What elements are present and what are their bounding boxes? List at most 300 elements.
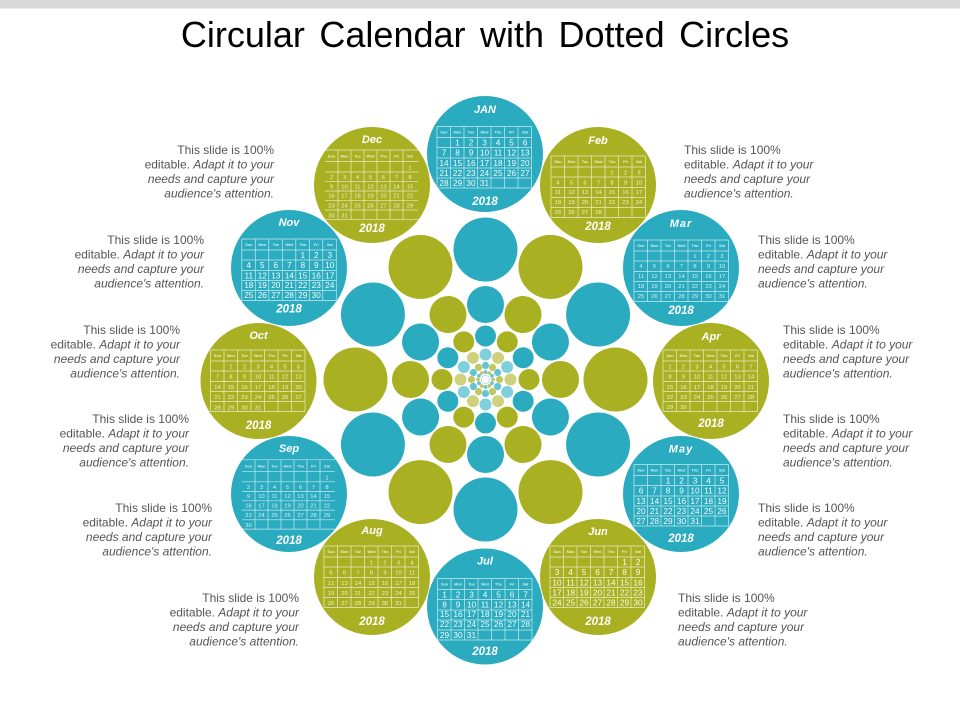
date grid: 17 <box>255 385 261 391</box>
date grid: Sat <box>636 160 643 164</box>
date grid: 28 <box>285 290 294 300</box>
date grid: 19 <box>507 158 516 168</box>
date grid: 20 <box>665 284 671 290</box>
date grid <box>438 578 532 640</box>
date grid: 28 <box>393 203 400 209</box>
date grid: 9 <box>682 374 685 380</box>
date grid: 29 <box>620 598 629 608</box>
date grid: Sun <box>245 243 253 247</box>
date grid: 16 <box>382 581 388 587</box>
date grid: 12 <box>282 374 288 380</box>
ring 3 <box>432 326 540 434</box>
date grid: Sat <box>523 582 529 586</box>
date grid: 24 <box>325 280 335 290</box>
date grid: 17 <box>395 581 402 587</box>
date grid: 5 <box>369 175 372 181</box>
date grid: 28 <box>650 516 659 526</box>
date grid: 20 <box>593 588 602 598</box>
date grid: 2 <box>243 364 246 370</box>
date grid: 18 <box>271 503 278 509</box>
text block: upper right 1: This slide is 100% <box>684 143 781 157</box>
date grid: 20 <box>507 609 517 619</box>
date grid: 8 <box>229 374 233 380</box>
date grid: 22 <box>324 503 330 509</box>
date grid: 17 <box>480 158 489 168</box>
date grid: Mon <box>258 464 266 468</box>
date grid: 2 <box>707 254 710 260</box>
date grid: 14 <box>285 270 294 280</box>
date grid: 8 <box>408 175 412 181</box>
dotted circles centre <box>324 218 648 542</box>
calendar: January <box>427 96 543 212</box>
date grid: 3 <box>327 250 332 260</box>
date grid: Wed <box>368 550 376 554</box>
month name: Dec <box>362 134 382 146</box>
date grid: Wed <box>678 244 686 248</box>
ring 6 <box>476 370 495 389</box>
text block: upper right 2: needs and capture your <box>758 262 885 276</box>
text block: middle left 2: This slide is 100% <box>92 412 189 426</box>
date grid: 22 <box>453 168 462 178</box>
date grid: 27 <box>507 619 517 629</box>
date grid: 15 <box>324 494 330 500</box>
date grid: 9 <box>314 260 319 270</box>
date grid: 13 <box>295 374 302 380</box>
date grid: 13 <box>582 190 588 196</box>
date grid: Fri <box>396 550 401 554</box>
date grid: 5 <box>286 485 289 491</box>
date grid: Thu <box>721 354 728 358</box>
date grid: 8 <box>442 600 447 610</box>
calendar: June <box>540 519 656 635</box>
date grid <box>634 464 728 526</box>
date grid: Fri <box>735 354 740 358</box>
date grid: 11 <box>354 184 361 190</box>
date grid: 17 <box>636 190 642 196</box>
date grid: Thu <box>299 243 307 247</box>
date grid: 7 <box>749 364 753 370</box>
date grid: 4 <box>639 264 643 270</box>
date grid: 16 <box>466 158 476 168</box>
date grid: 8 <box>370 570 373 576</box>
date grid: 30 <box>680 405 687 411</box>
date grid: Sun <box>214 354 222 358</box>
date grid: 11 <box>707 374 714 380</box>
date grid: 17 <box>467 609 476 619</box>
date grid: 10 <box>694 374 700 380</box>
date grid: 3 <box>343 175 346 181</box>
date grid: Sun <box>637 468 645 472</box>
date grid: 28 <box>310 513 317 519</box>
date grid: Fri <box>706 468 711 472</box>
date grid: 16 <box>241 385 248 391</box>
date grid: 26 <box>494 619 503 629</box>
year: 2018 <box>584 221 611 233</box>
date grid: Fri <box>283 354 287 358</box>
date grid: 24 <box>552 598 562 608</box>
date grid: Wed <box>481 582 490 586</box>
date grid: Thu <box>495 582 503 586</box>
date grid: 16 <box>633 578 643 588</box>
date grid: 24 <box>255 395 262 401</box>
date grid: 3 <box>637 170 641 176</box>
text block: upper left 2: needs and capture your <box>78 262 205 276</box>
date grid: 7 <box>680 264 683 270</box>
date grid: Sat <box>522 130 529 134</box>
month name: Aug <box>360 525 383 537</box>
date grid: 14 <box>393 184 400 190</box>
date grid: 9 <box>469 148 474 158</box>
date grid: 25 <box>493 168 503 178</box>
calendar: March <box>623 210 739 326</box>
date grid: 5 <box>722 364 726 370</box>
date grid: Tue <box>273 243 279 247</box>
text block: lower left 1: audience's attention. <box>102 544 212 558</box>
date grid: 1 <box>693 254 697 260</box>
date grid: 11 <box>271 494 278 500</box>
date grid: 31 <box>480 178 489 188</box>
date grid: 31 <box>341 213 348 219</box>
date grid: 27 <box>295 395 302 401</box>
date grid: 20 <box>734 385 741 391</box>
date grid: 19 <box>282 385 288 391</box>
date grid: 19 <box>717 496 727 506</box>
date grid: 23 <box>382 591 388 597</box>
date grid: 30 <box>382 601 388 607</box>
date grid: 23 <box>312 280 321 290</box>
date grid: 18 <box>244 280 254 290</box>
date grid: 13 <box>341 581 348 587</box>
date grid: 9 <box>679 486 684 496</box>
date grid <box>325 150 418 219</box>
date grid: Mon <box>341 154 349 158</box>
date grid: 12 <box>494 600 503 610</box>
date grid: 17 <box>258 503 265 509</box>
date grid: Sat <box>719 244 726 248</box>
date grid: Tue <box>271 464 278 468</box>
date grid: 20 <box>295 385 302 391</box>
date grid: 17 <box>325 270 335 280</box>
date grid: 28 <box>595 210 602 216</box>
date grid: 3 <box>695 364 699 370</box>
date grid: 4 <box>709 364 713 370</box>
date grid: 24 <box>395 591 402 597</box>
date grid: 27 <box>593 598 602 608</box>
month name: Mar <box>670 218 692 230</box>
date grid: 15 <box>620 578 629 588</box>
date grid: 12 <box>651 274 658 280</box>
date grid: 26 <box>651 294 658 300</box>
date grid: 28 <box>678 294 685 300</box>
date grid: 14 <box>214 385 221 391</box>
date grid <box>210 350 305 412</box>
calendar: September <box>231 436 347 552</box>
date grid: Fri <box>314 243 319 247</box>
date grid: 11 <box>268 374 275 380</box>
text block: lower right 1: needs and capture your <box>758 530 885 544</box>
date grid: 18 <box>480 609 490 619</box>
date grid: 23 <box>466 168 476 178</box>
date grid: Mon <box>567 550 575 554</box>
calendar: May <box>623 436 739 552</box>
year: 2018 <box>697 418 724 430</box>
date grid: 27 <box>636 516 646 526</box>
date grid: 9 <box>456 600 461 610</box>
date grid: 17 <box>341 194 348 200</box>
date grid: 20 <box>271 280 281 290</box>
date grid: Fri <box>623 160 628 164</box>
date grid: 5 <box>329 570 333 576</box>
date grid <box>551 156 646 218</box>
date grid: 22 <box>663 506 673 516</box>
text block: middle right 2: audience's attention. <box>783 456 893 470</box>
text block: middle right 2: editable. Adapt it to your <box>783 426 912 440</box>
date grid: 16 <box>622 190 629 196</box>
text block: upper right 2: editable. Adapt it to your <box>758 248 887 262</box>
date grid: 2 <box>314 250 319 260</box>
text block: upper right 2: This slide is 100% <box>758 233 855 247</box>
date grid: 12 <box>367 184 374 190</box>
month name: Jun <box>588 526 608 538</box>
date grid: Thu <box>609 160 616 164</box>
text block: middle right 1: editable. Adapt it to your <box>783 338 912 352</box>
date grid: 1 <box>442 590 447 600</box>
date grid: Mon <box>454 582 463 586</box>
date grid: Tue <box>665 244 671 248</box>
year: 2018 <box>358 616 385 628</box>
date grid: 18 <box>707 385 714 391</box>
date grid: 4 <box>270 364 274 370</box>
date grid: 27 <box>271 290 281 300</box>
date grid: 24 <box>341 203 348 209</box>
date grid: 17 <box>690 496 700 506</box>
date grid: 25 <box>354 203 361 209</box>
date grid: 18 <box>409 581 415 587</box>
date grid: 6 <box>273 260 278 270</box>
date grid: 24 <box>719 284 726 290</box>
month name: Jul <box>477 556 494 568</box>
text block: middle left 1: needs and capture your <box>54 352 181 366</box>
date grid: 7 <box>356 570 360 576</box>
date grid: 19 <box>328 591 334 597</box>
date grid: 31 <box>690 516 700 526</box>
date grid: Thu <box>608 550 615 554</box>
calendar: December <box>314 127 430 243</box>
ring 2 <box>392 286 579 473</box>
date grid: 2 <box>624 170 627 176</box>
date grid: 11 <box>638 274 644 280</box>
date grid: Fri <box>394 154 399 158</box>
date grid: 16 <box>677 496 686 506</box>
date grid: 25 <box>704 506 713 516</box>
date grid: 30 <box>328 213 335 219</box>
text block: lower right 1: editable. Adapt it to your <box>758 516 887 530</box>
date grid: 28 <box>214 406 221 412</box>
date grid: 25 <box>480 619 490 629</box>
date grid: 12 <box>717 486 727 496</box>
date grid: Wed <box>285 243 294 247</box>
date grid: 19 <box>568 200 575 206</box>
date grid: 9 <box>247 494 250 500</box>
date grid: 10 <box>395 570 402 576</box>
date grid: Wed <box>595 160 603 164</box>
date grid: Sun <box>637 244 645 248</box>
text block: upper left 2: audience's attention. <box>94 276 204 290</box>
date grid: 22 <box>440 619 449 629</box>
date grid: Mon <box>651 468 659 472</box>
date grid: Sat <box>407 154 414 158</box>
date grid: Tue <box>355 550 361 554</box>
text block: lower left 1: editable. Adapt it to your <box>83 516 212 530</box>
date grid: 22 <box>609 200 615 206</box>
date grid: 6 <box>382 175 385 181</box>
date grid: 16 <box>705 274 712 280</box>
year: 2018 <box>667 305 694 317</box>
date grid: 2 <box>636 557 641 567</box>
date grid: 6 <box>343 570 346 576</box>
text block: upper left 1: audience's attention. <box>164 186 274 200</box>
date grid: Mon <box>454 130 462 134</box>
date grid: 21 <box>606 588 616 598</box>
date grid: 20 <box>297 503 304 509</box>
date grid: Sun <box>328 154 336 158</box>
date grid: 13 <box>665 274 671 280</box>
date grid: 13 <box>520 148 530 158</box>
date grid: 13 <box>380 184 387 190</box>
date grid: 12 <box>507 148 516 158</box>
date grid: 24 <box>480 168 489 178</box>
date grid: 1 <box>408 166 412 172</box>
text block: upper left 1: editable. Adapt it to your <box>145 158 274 172</box>
date grid <box>324 546 418 608</box>
date grid: 23 <box>705 284 712 290</box>
date grid: 18 <box>354 194 361 200</box>
date grid: 4 <box>556 180 560 186</box>
date grid: 23 <box>328 203 335 209</box>
date grid: 25 <box>555 210 561 216</box>
month name: Oct <box>249 330 269 342</box>
date grid: Wed <box>594 550 602 554</box>
date grid: 31 <box>395 601 402 607</box>
date grid: 20 <box>341 591 348 597</box>
year: 2018 <box>584 616 611 628</box>
text block: lower left 1: needs and capture your <box>86 530 213 544</box>
date grid: Sun <box>245 464 253 468</box>
date grid: 12 <box>284 494 291 500</box>
date grid: Wed <box>367 154 375 158</box>
date grid: 5 <box>570 180 573 186</box>
date grid: Thu <box>692 468 699 472</box>
text block: lower left 2: editable. Adapt it to your <box>170 606 299 620</box>
text block: upper right 1: audience's attention. <box>684 186 794 200</box>
date grid: 30 <box>453 630 463 640</box>
date grid: 14 <box>521 600 530 610</box>
text block: middle left 2: editable. Adapt it to your <box>60 426 189 440</box>
date grid: 13 <box>734 374 741 380</box>
title: Circular Calendar with Dotted Circles <box>181 14 789 55</box>
date grid: 8 <box>666 486 671 496</box>
date grid: 21 <box>310 503 317 509</box>
text block: upper left 1: This slide is 100% <box>177 143 274 157</box>
date grid: 27 <box>341 601 348 607</box>
date grid: 23 <box>622 200 629 206</box>
date grid: 22 <box>298 280 308 290</box>
text block: lower right 1: audience's attention. <box>758 544 868 558</box>
date grid: 23 <box>453 619 463 629</box>
year: 2018 <box>245 420 272 432</box>
date grid: 8 <box>668 374 672 380</box>
date grid: 24 <box>258 513 265 519</box>
date grid: 15 <box>368 581 375 587</box>
date grid: 29 <box>692 294 698 300</box>
date grid: 29 <box>228 406 234 412</box>
date grid: 7 <box>216 374 219 380</box>
date grid: Wed <box>254 354 263 358</box>
date grid: 10 <box>467 600 476 610</box>
date grid: Mon <box>680 354 688 358</box>
date grid: 23 <box>245 513 252 519</box>
date grid: 11 <box>494 148 503 158</box>
date grid: 27 <box>520 168 530 178</box>
date grid: 21 <box>355 591 361 597</box>
date grid: Thu <box>692 244 699 248</box>
date grid: 22 <box>667 395 673 401</box>
date grid: 21 <box>393 194 400 200</box>
year: 2018 <box>358 223 385 235</box>
date grid: 10 <box>719 264 725 270</box>
date grid: 4 <box>568 567 573 577</box>
date grid: 25 <box>638 294 644 300</box>
month name: Sep <box>279 443 299 455</box>
date grid: 26 <box>507 168 516 178</box>
text block: upper right 2: audience's attention. <box>758 276 868 290</box>
date grid <box>242 239 336 300</box>
date grid: 25 <box>268 395 275 401</box>
date grid: 20 <box>636 506 646 516</box>
date grid <box>634 240 728 302</box>
date grid: 8 <box>325 485 329 491</box>
date grid: Sun <box>553 550 561 554</box>
date grid: 19 <box>494 609 503 619</box>
date grid: 6 <box>736 364 739 370</box>
date grid: 22 <box>692 284 698 290</box>
text block: middle right 2: This slide is 100% <box>783 412 880 426</box>
date grid: 5 <box>582 567 587 577</box>
date grid: Sun <box>441 582 449 586</box>
date grid: Tue <box>581 550 587 554</box>
text block: lower left 1: This slide is 100% <box>115 501 212 515</box>
date grid: 24 <box>690 506 700 516</box>
text block: middle left 2: audience's attention. <box>79 456 189 470</box>
date grid: 7 <box>395 175 398 181</box>
date grid: 6 <box>523 138 528 148</box>
date grid: 8 <box>300 260 305 270</box>
date grid: 3 <box>482 138 487 148</box>
date grid: 28 <box>439 178 449 188</box>
text block: middle right 1: This slide is 100% <box>783 323 880 337</box>
date grid: 22 <box>368 591 375 597</box>
date grid: 29 <box>324 513 330 519</box>
date grid: 21 <box>650 506 659 516</box>
date grid: 18 <box>566 588 575 598</box>
date grid: 10 <box>552 578 562 588</box>
date grid: Tue <box>468 582 475 586</box>
date grid: Sat <box>719 468 726 472</box>
date grid: Sat <box>748 354 755 358</box>
date grid: 15 <box>440 609 449 619</box>
year: 2018 <box>275 535 302 547</box>
date grid: 30 <box>677 516 686 526</box>
